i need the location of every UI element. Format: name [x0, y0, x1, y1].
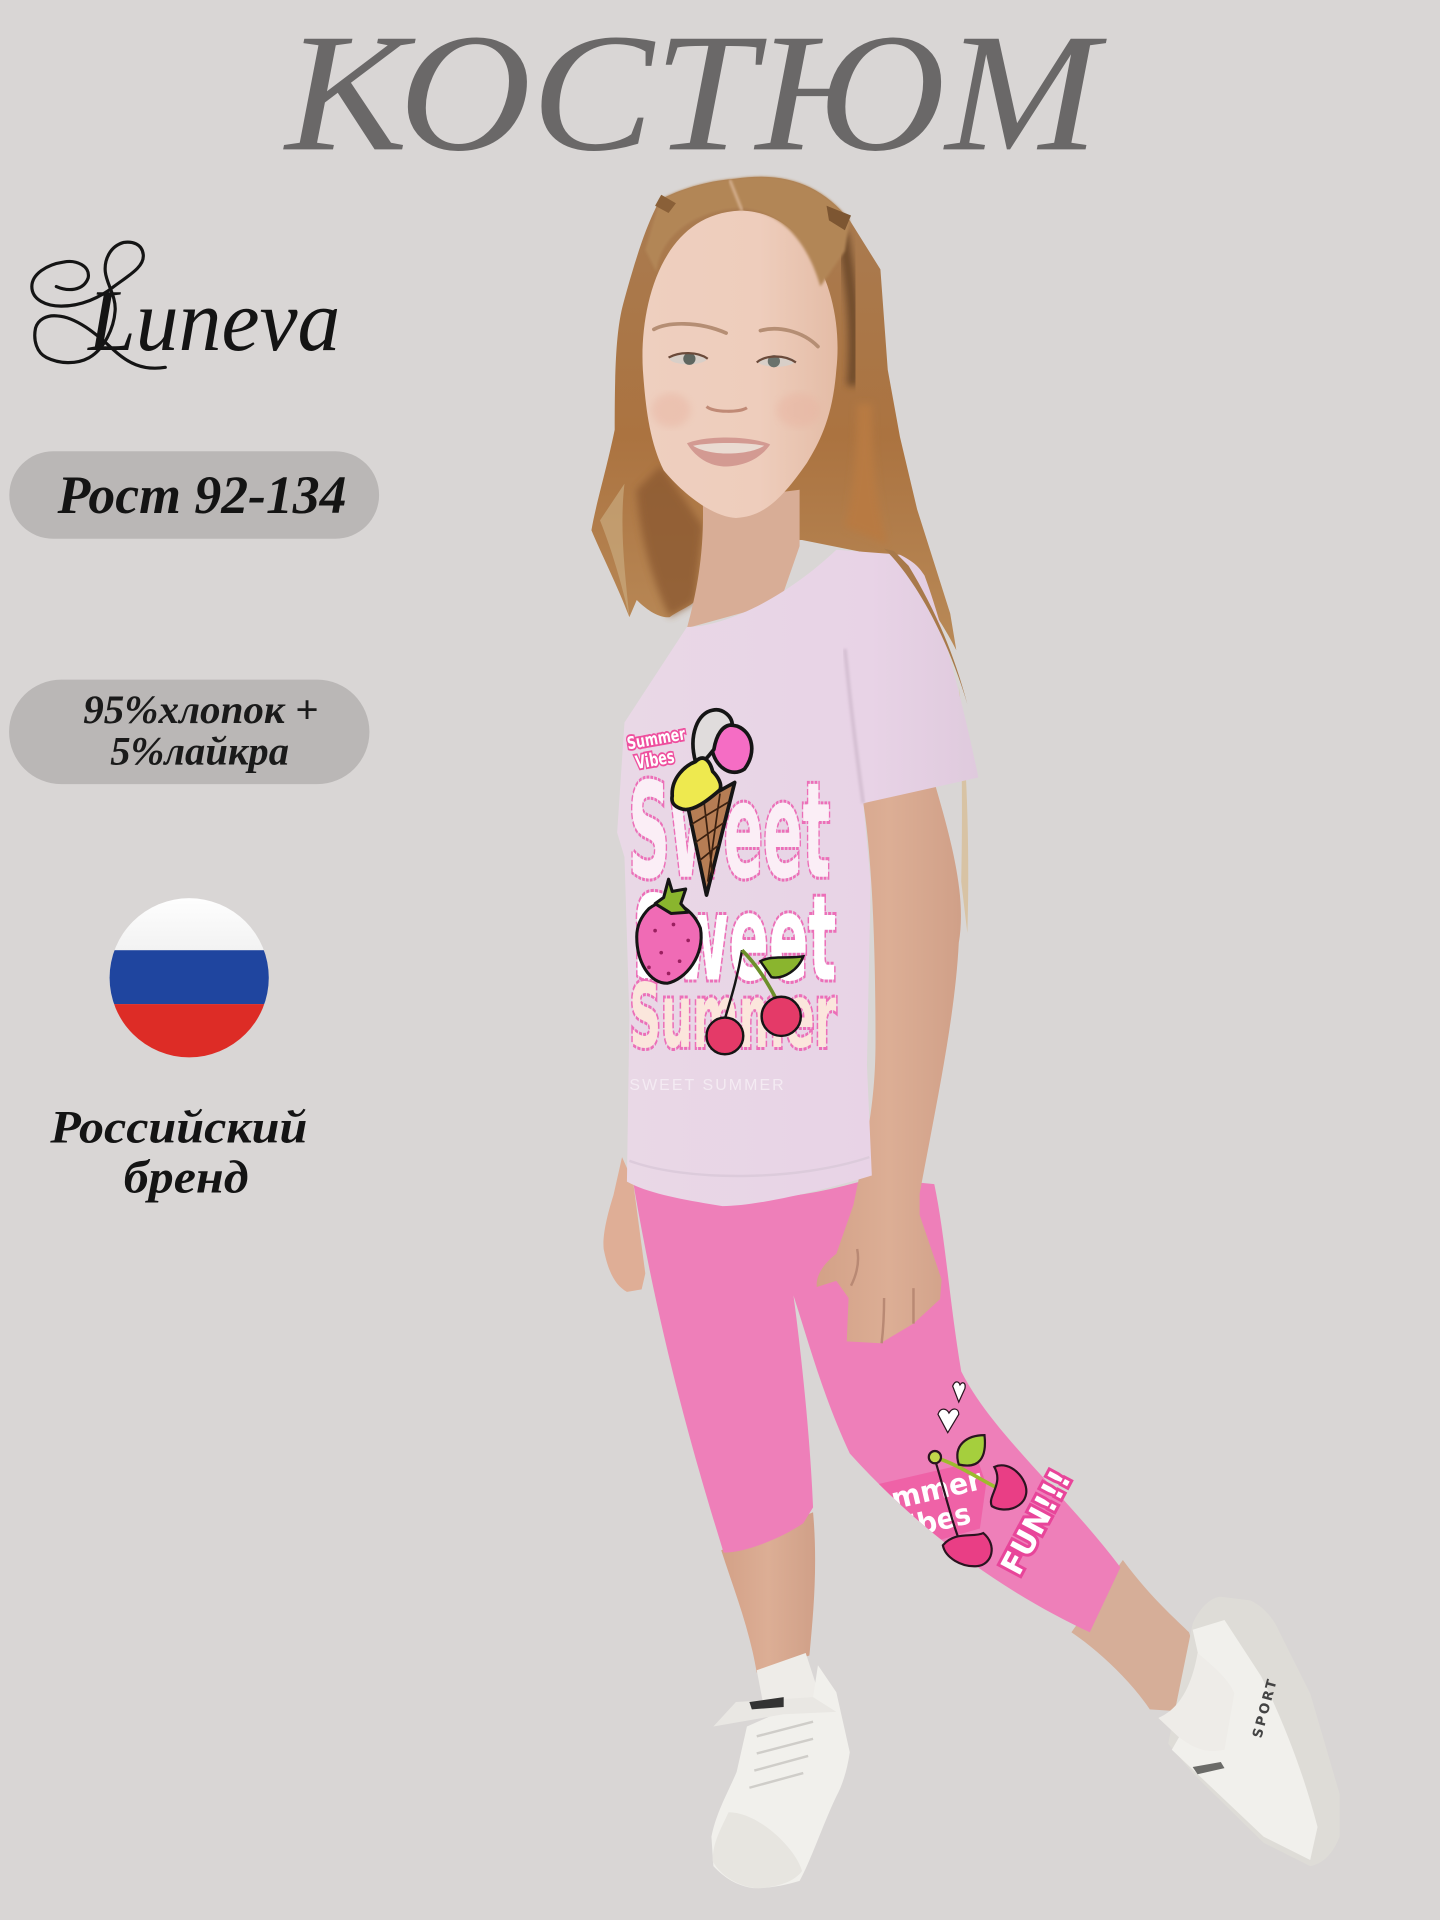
title: КОСТЮМ — [283, 0, 1107, 186]
nose — [707, 407, 747, 411]
print: fun label: FUN!!! — [995, 1465, 1079, 1581]
leggings print — [879, 1381, 1074, 1579]
arm left — [603, 1157, 645, 1292]
lower leg left — [721, 1512, 815, 1673]
print: sequin letters — [628, 755, 837, 1068]
print: hearts — [938, 1382, 965, 1433]
girl figure — [591, 177, 1340, 1888]
print: sweet summer caption: SWEET SUMMER — [629, 1077, 784, 1094]
face — [642, 211, 838, 518]
hair top — [645, 177, 851, 287]
pill: height range: Рост 92-134 — [57, 465, 347, 525]
print: summer vibes label — [879, 1463, 986, 1540]
print: ice cream — [672, 710, 752, 895]
pill: fabric composition — [9, 680, 369, 784]
caption: Russian brand — [49, 1102, 307, 1204]
pill: height range — [9, 451, 379, 539]
shoe right — [1168, 1597, 1340, 1866]
print: cherries — [929, 1435, 1026, 1566]
t-shirt — [617, 550, 978, 1206]
neck — [687, 490, 800, 628]
caption: Russian brand: Российский — [49, 1102, 307, 1153]
mouth — [687, 437, 770, 467]
print: cherries — [707, 950, 803, 1054]
print: summer vibes label: Summer — [848, 1462, 985, 1525]
socks and shoes — [711, 1597, 1340, 1888]
sock right — [1158, 1653, 1234, 1751]
caption: Russian brand: бренд — [124, 1153, 249, 1204]
eyes — [669, 353, 796, 367]
icon: Russian flag — [110, 898, 269, 1058]
shoe left — [711, 1665, 850, 1888]
leggings — [633, 1178, 1120, 1632]
sock left — [757, 1653, 822, 1702]
t-shirt print — [626, 710, 837, 1094]
pill: fabric composition: 5%лайкра — [110, 729, 289, 774]
print: sequin letters: Summer — [629, 965, 837, 1068]
print: summer vibes label: Vibes — [634, 746, 676, 774]
hair back — [591, 177, 968, 933]
shoe right: SPORT — [1251, 1676, 1281, 1740]
print: summer vibes label: Summer — [626, 724, 687, 754]
logo: Luneva: Luneva — [86, 272, 340, 370]
logo: Luneva — [32, 242, 340, 370]
cheeks — [651, 393, 820, 427]
eyebrows — [654, 324, 818, 347]
lower leg right — [1071, 1560, 1224, 1714]
print: summer vibes label: Vibes — [885, 1496, 974, 1548]
hair strand over shoulder — [884, 549, 967, 704]
print: summer vibes label — [626, 724, 691, 775]
print: strawberry — [637, 879, 701, 983]
pill: fabric composition: 95%хлопок + — [83, 687, 318, 732]
arm right with hand — [817, 778, 961, 1343]
girl figure: Sweet — [633, 871, 836, 1008]
girl figure: Sweet — [628, 755, 830, 909]
